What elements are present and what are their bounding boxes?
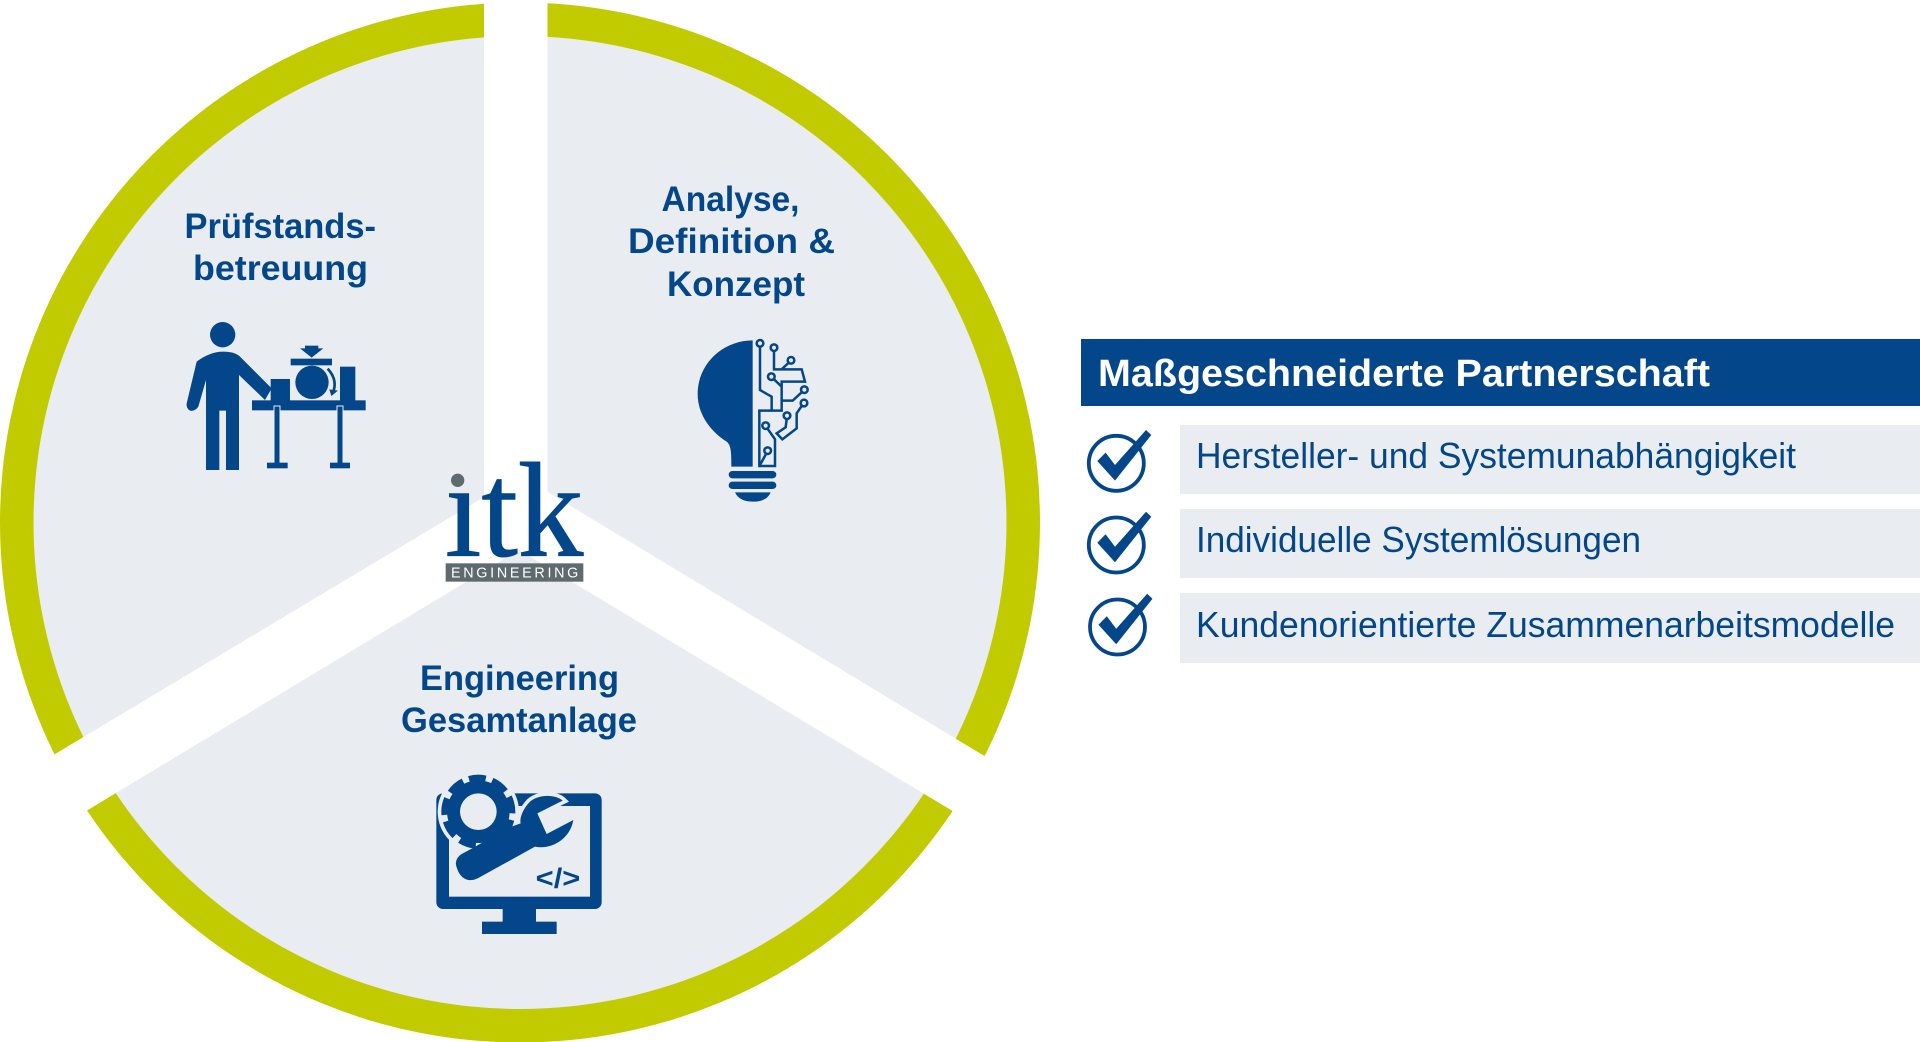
grey inner disc — [34, 36, 1006, 1009]
row 3 background — [1180, 593, 1920, 663]
heading: Engineering Gesamtanlage: Gesamtanlage — [401, 701, 637, 740]
heading: Prüfstandsbetreuung: betreuung — [193, 249, 368, 288]
icon: light bulb with circuit — [698, 340, 808, 502]
icon: check 1 — [1089, 430, 1151, 491]
heading: Analyse, Definition & Konzept: Konzept — [667, 265, 805, 304]
logo dot — [451, 474, 464, 487]
logo band — [446, 563, 583, 582]
heading: Analyse, Definition & Konzept — [628, 180, 835, 304]
heading: Prüfstandsbetreuung: Prüfstands- — [184, 207, 376, 246]
icon: person at test bench — [187, 322, 366, 470]
row 3 text: Kundenorientierte Zusammenarbeitsmodelle — [1196, 604, 1895, 645]
logo: itk Engineering — [445, 437, 584, 586]
header bar — [1081, 339, 1920, 406]
heading: Analyse, Definition & Konzept: Definition & — [628, 222, 835, 261]
row 1 text: Hersteller- und Systemunabhängigkeit — [1196, 435, 1796, 476]
heading: Analyse, Definition & Konzept: Analyse, — [662, 180, 800, 219]
pie diagram with three segments — [0, 0, 1050, 1042]
heading: Engineering Gesamtanlage: Engineering — [420, 659, 619, 698]
icon: monitor with gear and wrench — [436, 770, 602, 934]
code symbol: </> — [536, 862, 580, 893]
icon: check 3 — [1090, 594, 1152, 654]
logo letters: ıtk — [445, 437, 584, 586]
heading: Prüfstandsbetreuung — [184, 207, 376, 288]
panel title: Maßgeschneiderte Partnerschaft — [1098, 353, 1710, 395]
icon: check 2 — [1089, 512, 1151, 572]
white segment separators — [0, 0, 1050, 870]
row 1 background — [1180, 425, 1920, 494]
green outer ring — [0, 2, 1040, 1042]
panel: tailored partnership — [1081, 339, 1920, 663]
heading: Engineering Gesamtanlage — [401, 659, 637, 740]
row 2 text: Individuelle Systemlösungen — [1196, 519, 1641, 560]
logo band text: ENGINEERING — [451, 566, 578, 582]
row 2 background — [1180, 509, 1920, 578]
